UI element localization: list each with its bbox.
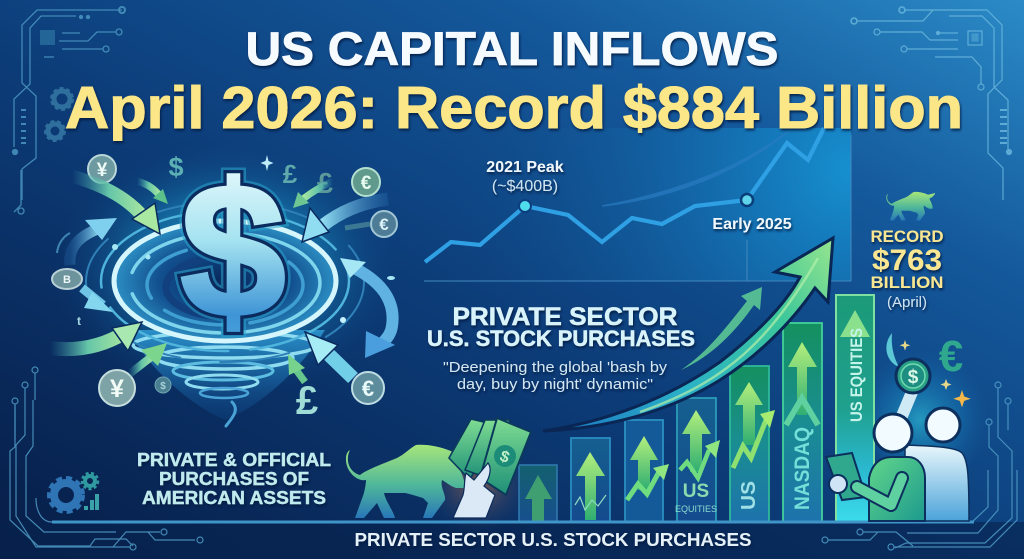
quote: "Deepening the global 'bash by [443,359,668,376]
icon: currency coins: t [77,314,81,328]
arrow: small green upper right [293,181,333,208]
bar 1 [519,465,557,522]
icon: money bills [449,418,531,495]
arrow: lower green [128,343,167,375]
funnel rings [133,332,317,426]
icon: currency coins: ¥ [97,160,108,181]
swoosh [602,130,790,206]
marker: early 2025 [741,194,753,206]
icon: euro and sparkles [886,332,971,407]
bar 6: NASDAQ [791,427,814,510]
glow behind bull hand [423,435,533,535]
data line [425,128,824,262]
chart axis lines [424,135,851,281]
icon: currency coins: ¥ [110,375,124,403]
hand [829,475,847,493]
marker: 2021 peak [519,200,531,212]
icon: currency coins: £ [317,168,333,200]
icon: people with tablet and coin [826,359,969,521]
arrow: lower left green [50,322,142,351]
icon: currency coins: B [63,274,71,286]
icon: dollar sign: $ [180,145,286,357]
line chart [424,128,851,281]
heading: private sector stock purchases: U.S. STOCK PURCHASES [427,326,695,351]
text: private and official purchases: AMERICAN ASSETS [142,488,326,508]
arrow: coin to vortex [82,288,113,312]
icon: gears top left [45,88,73,141]
arm [857,478,902,505]
icon: currency coins [52,152,397,423]
coin [896,359,930,393]
funnel body [128,330,325,420]
circuit decoration: top right [851,7,1012,200]
heading: private sector stock purchases [427,303,695,351]
icon: gears and mini bars bottom left [49,473,99,512]
text: record 763 billion: (April) [887,294,927,311]
subtitle: record figure: April 2026: Record $884 Billion [65,75,963,141]
title: US CAPITAL INFLOWS [246,22,778,75]
chart background panel [424,128,851,281]
chart baseline [52,520,974,524]
bar 4: US [683,481,709,502]
big growth arrow [543,238,833,431]
text: private and official purchases: PURCHASES OF [159,469,309,489]
arrow: blue top right [302,199,388,242]
raised arm [902,392,912,416]
arrow: upper left blue [70,218,117,265]
icon: bull [346,445,471,518]
text: record 763 billion [870,227,944,311]
bar 6 [783,323,822,522]
bar 7: US EQUITIES [847,328,866,422]
icon: money bills: $ [497,448,512,467]
icon: currency coins: $ [168,152,184,182]
circuit decoration: bottom right [822,382,1017,550]
text: private and official purchases: PRIVATE & OFFICIAL [137,450,331,470]
bar 2 [571,438,610,522]
arrow: small faded from euro [345,224,370,228]
bar 5 [730,366,775,522]
icon: euro and sparkles: € [939,332,963,381]
cyan glow behind people [850,350,990,490]
arrow: bottom right [305,332,353,378]
icon: dollar sign: $ [180,145,286,357]
icon: small bull [886,192,935,220]
vortex glow [53,138,403,398]
arrow: right curved [340,258,395,358]
footer label: PRIVATE SECTOR U.S. STOCK PURCHASES [354,529,752,550]
text: record 763 billion: $763 [872,244,942,277]
arrow: thin [57,233,70,253]
coin: $ [908,367,919,388]
quote: day, buy by night' dynamic" [457,376,653,393]
arrow: green top left [72,176,160,234]
icon: currency coins: $ [160,381,166,392]
icon: hand with cuff [453,463,495,518]
back person [905,408,969,521]
icon: dollar sign: $ [180,145,286,357]
label: early 2025: Early 2025 [712,216,792,233]
quote [443,359,668,393]
bar 4 [675,398,720,522]
bar 4: EQUITIES [675,504,717,514]
heading: private sector stock purchases: PRIVATE SECTOR [452,303,678,331]
icon: currency coins: € [361,173,372,194]
small green arrow [681,287,762,370]
vortex rings [114,221,336,341]
label: 2021 peak: (~$400B) [492,178,558,195]
tablet [826,453,866,500]
circuit decoration: bottom left [10,367,203,550]
arrow: small green bottom right [288,354,305,382]
bottom band [0,522,1024,559]
icon: currency coins: € [379,215,389,234]
icon: currency coins: £ [283,159,298,189]
bar 7 [836,295,874,522]
arrows into vortex [50,176,395,382]
icon: currency coins: £ [296,379,318,423]
bar chart [519,295,874,522]
circuit decoration: top left [12,7,125,214]
panel: dollar vortex [53,138,403,426]
label: 2021 peak: 2021 Peak [486,159,564,176]
front person [869,414,925,521]
icon: currency coins: € [362,376,374,401]
text: record 763 billion: RECORD [870,227,944,246]
text: private and official purchases [137,450,331,508]
bar 5: US [738,481,760,510]
text: record 763 billion: BILLION [870,273,944,292]
bar 3 [625,420,669,522]
label: 2021 peak [486,159,564,195]
arrow: small green top [137,181,168,204]
